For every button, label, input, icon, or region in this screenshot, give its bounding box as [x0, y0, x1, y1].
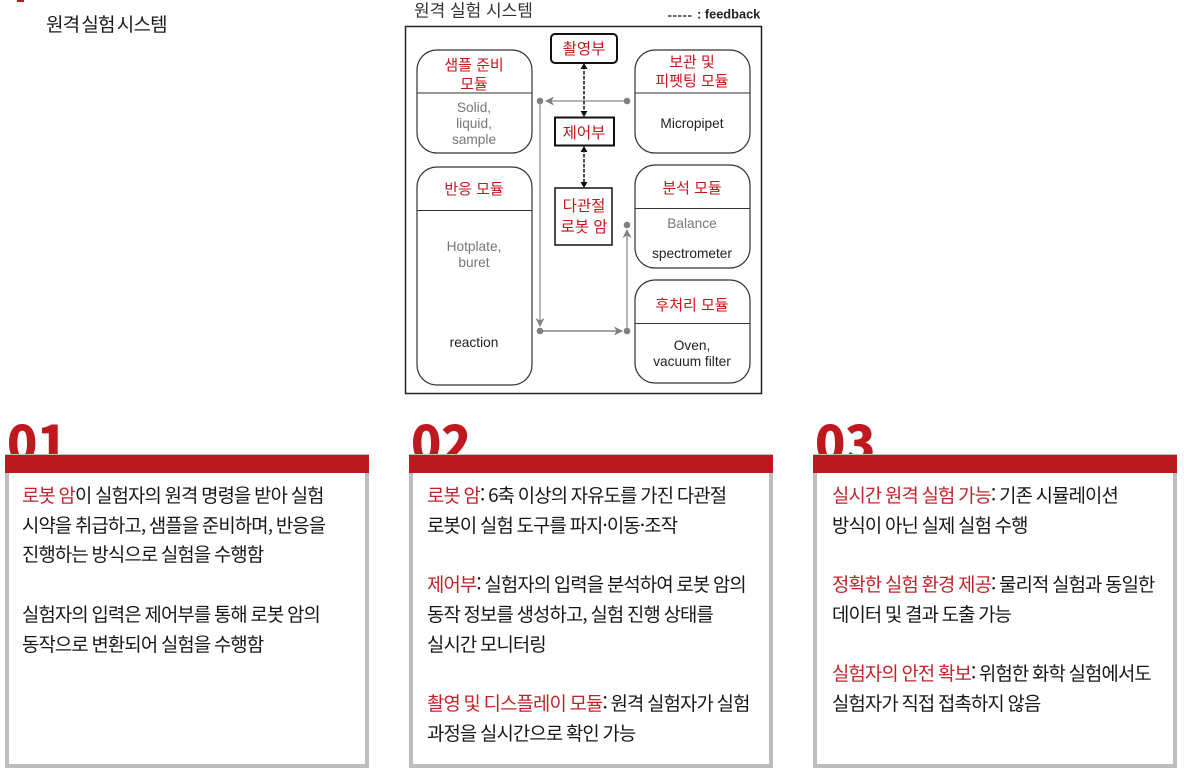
panel 02 text: 동작 정보를 생성하고, 실험 진행 상태를	[427, 600, 713, 627]
module: post-processing: vacuum filter	[653, 354, 731, 369]
module: reaction: reaction	[450, 335, 498, 350]
panel 02 text	[427, 481, 750, 746]
panel 03	[813, 454, 1177, 768]
unit: articulated robot arm: 로봇 암	[560, 218, 608, 236]
arrow: sample down to reaction	[536, 101, 544, 327]
module: sample preparation: sample	[452, 132, 496, 147]
unit: imaging: 촬영부	[563, 40, 605, 58]
panel 03 text: 실험자의 안전 확보: 위험한 화학 실험에서도	[832, 659, 1151, 686]
panel 02 text: 제어부: 실험자의 입력을 분석하여 로봇 암의	[427, 570, 746, 597]
panel 02	[409, 454, 773, 768]
legend: feedback: : feedback	[697, 6, 761, 22]
panel 02 text: 로봇 암: 6축 이상의 자유도를 가진 다관절	[427, 481, 726, 508]
panel 02 text: 실시간 모니터링	[427, 630, 546, 657]
arrow: reaction to post-processing	[537, 326, 630, 336]
panel 01 text: 시약을 취급하고, 샘플을 준비하며, 반응을	[22, 511, 325, 538]
panel 01 text	[22, 481, 326, 657]
module: sample preparation	[417, 50, 532, 153]
panel 01 text: 진행하는 방식으로 실험을 수행함	[22, 540, 263, 567]
module: storage and pipetting: Micropipet	[660, 116, 724, 131]
module: reaction	[417, 167, 532, 385]
panel 03 text: 실시간 원격 실험 가능: 기존 시뮬레이션	[832, 481, 1118, 508]
module: storage and pipetting: 피펫팅 모듈	[655, 73, 729, 90]
diagram title: 원격 실험 시스템	[414, 2, 533, 20]
panel 01 header band	[5, 455, 369, 473]
module: reaction: buret	[458, 255, 490, 270]
panel 01 text: 실험자의 입력은 제어부를 통해 로봇 암의	[22, 600, 320, 627]
module: post-processing: 후처리 모듈	[655, 297, 729, 314]
module: storage and pipetting: 보관 및	[669, 54, 715, 71]
arrow: imaging to control feedback	[580, 63, 588, 117]
module: post-processing: Oven,	[674, 338, 710, 353]
module: sample preparation: liquid,	[456, 116, 492, 131]
outer frame	[406, 26, 762, 394]
module: analysis	[635, 165, 750, 268]
panel 03 text: 정확한 실험 환경 제공: 물리적 실험과 동일한	[832, 570, 1155, 597]
unit: imaging	[551, 34, 617, 63]
module: sample preparation: 모듈	[460, 76, 488, 93]
module: analysis: Balance	[667, 216, 717, 231]
decorative red marker	[17, 0, 24, 2]
arrow: storage to sample	[537, 96, 630, 106]
module: sample preparation: Solid,	[457, 100, 491, 115]
unit: control: 제어부	[563, 124, 605, 142]
panel 02 text: 촬영 및 디스플레이 모듈: 원격 실험자가 실험	[427, 689, 750, 716]
unit: articulated robot arm	[555, 188, 612, 245]
unit: articulated robot arm: 다관절	[563, 197, 605, 215]
panel 03 text: 실험자가 직접 접촉하지 않음	[832, 689, 1040, 716]
module: storage and pipetting	[635, 50, 750, 153]
panel 02 text: 과정을 실시간으로 확인 가능	[427, 719, 635, 746]
panel 02 text: 로봇이 실험 도구를 파지·이동·조작	[427, 511, 677, 538]
unit: control	[555, 118, 614, 146]
page heading: 원격 실험 시스템	[46, 10, 167, 37]
panel 02 header band	[409, 455, 773, 473]
panel 03 text: 방식이 아닌 실제 실험 수행	[832, 511, 1028, 538]
legend: feedback	[668, 6, 761, 22]
module: sample preparation: 샘플 준비	[444, 57, 504, 74]
arrow: post-processing to analysis	[622, 222, 632, 331]
module: analysis: spectrometer	[652, 246, 732, 261]
module: reaction: 반응 모듈	[444, 181, 504, 198]
panel 03 header band	[813, 455, 1177, 473]
panel 01 text: 동작으로 변환되어 실험을 수행함	[22, 630, 263, 657]
arrow: control to robot arm feedback	[580, 146, 588, 188]
module: reaction: Hotplate,	[447, 239, 501, 254]
module: post-processing	[635, 280, 750, 383]
panel 03 text	[832, 481, 1155, 716]
diagram: remote experiment system	[404, 2, 762, 394]
module: analysis: 분석 모듈	[662, 180, 722, 197]
panel 01 text: 로봇 암이 실험자의 원격 명령을 받아 실험	[22, 481, 324, 508]
panel 01	[5, 454, 369, 768]
panel 03 text: 데이터 및 결과 도출 가능	[832, 600, 1011, 627]
